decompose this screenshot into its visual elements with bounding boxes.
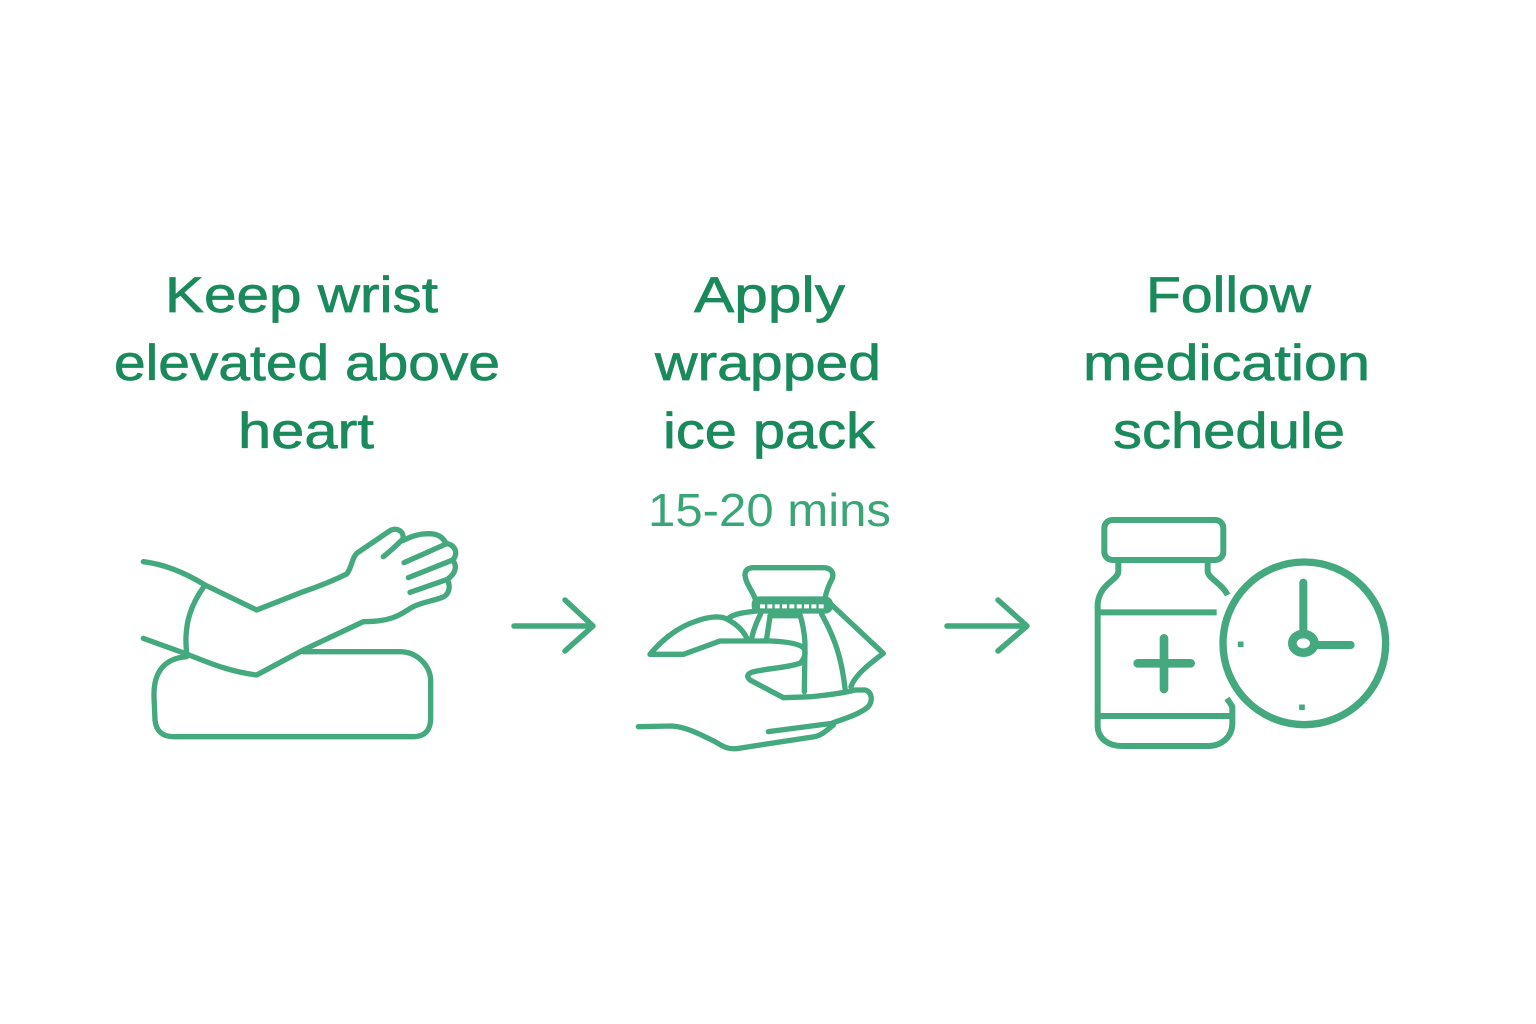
heading: keep wrist elevated above heart bbox=[114, 267, 500, 459]
panel: follow medication schedule bbox=[1083, 267, 1386, 746]
panel: apply wrapped ice pack bbox=[638, 267, 891, 749]
heading: apply wrapped ice pack bbox=[654, 267, 881, 459]
arrow: step two to step three bbox=[947, 600, 1027, 651]
heading: keep wrist elevated above heart: Keep wrist bbox=[165, 267, 438, 323]
heading: apply wrapped ice pack: Apply bbox=[694, 267, 845, 323]
heading: follow medication schedule bbox=[1083, 267, 1370, 459]
heading: follow medication schedule: medication bbox=[1083, 335, 1370, 391]
clock bbox=[1223, 562, 1386, 725]
heading: follow medication schedule: schedule bbox=[1113, 403, 1345, 459]
icon: medicine bottle and clock bbox=[1098, 520, 1386, 746]
duration label: 15-20 mins bbox=[648, 484, 891, 536]
heading: keep wrist elevated above heart: elevated above bbox=[114, 335, 500, 391]
heading: follow medication schedule: Follow bbox=[1146, 267, 1312, 323]
icon: raised arm on pillow bbox=[143, 529, 456, 737]
panel: keep wrist elevated bbox=[114, 267, 500, 737]
heading: keep wrist elevated above heart: heart bbox=[238, 403, 374, 459]
arrow: step one to step two bbox=[514, 600, 593, 651]
icon: hand holding ice pack bbox=[638, 568, 883, 749]
medicine bottle bbox=[1098, 520, 1232, 746]
heading: apply wrapped ice pack: ice pack bbox=[663, 403, 876, 459]
heading: apply wrapped ice pack: wrapped bbox=[654, 335, 881, 391]
